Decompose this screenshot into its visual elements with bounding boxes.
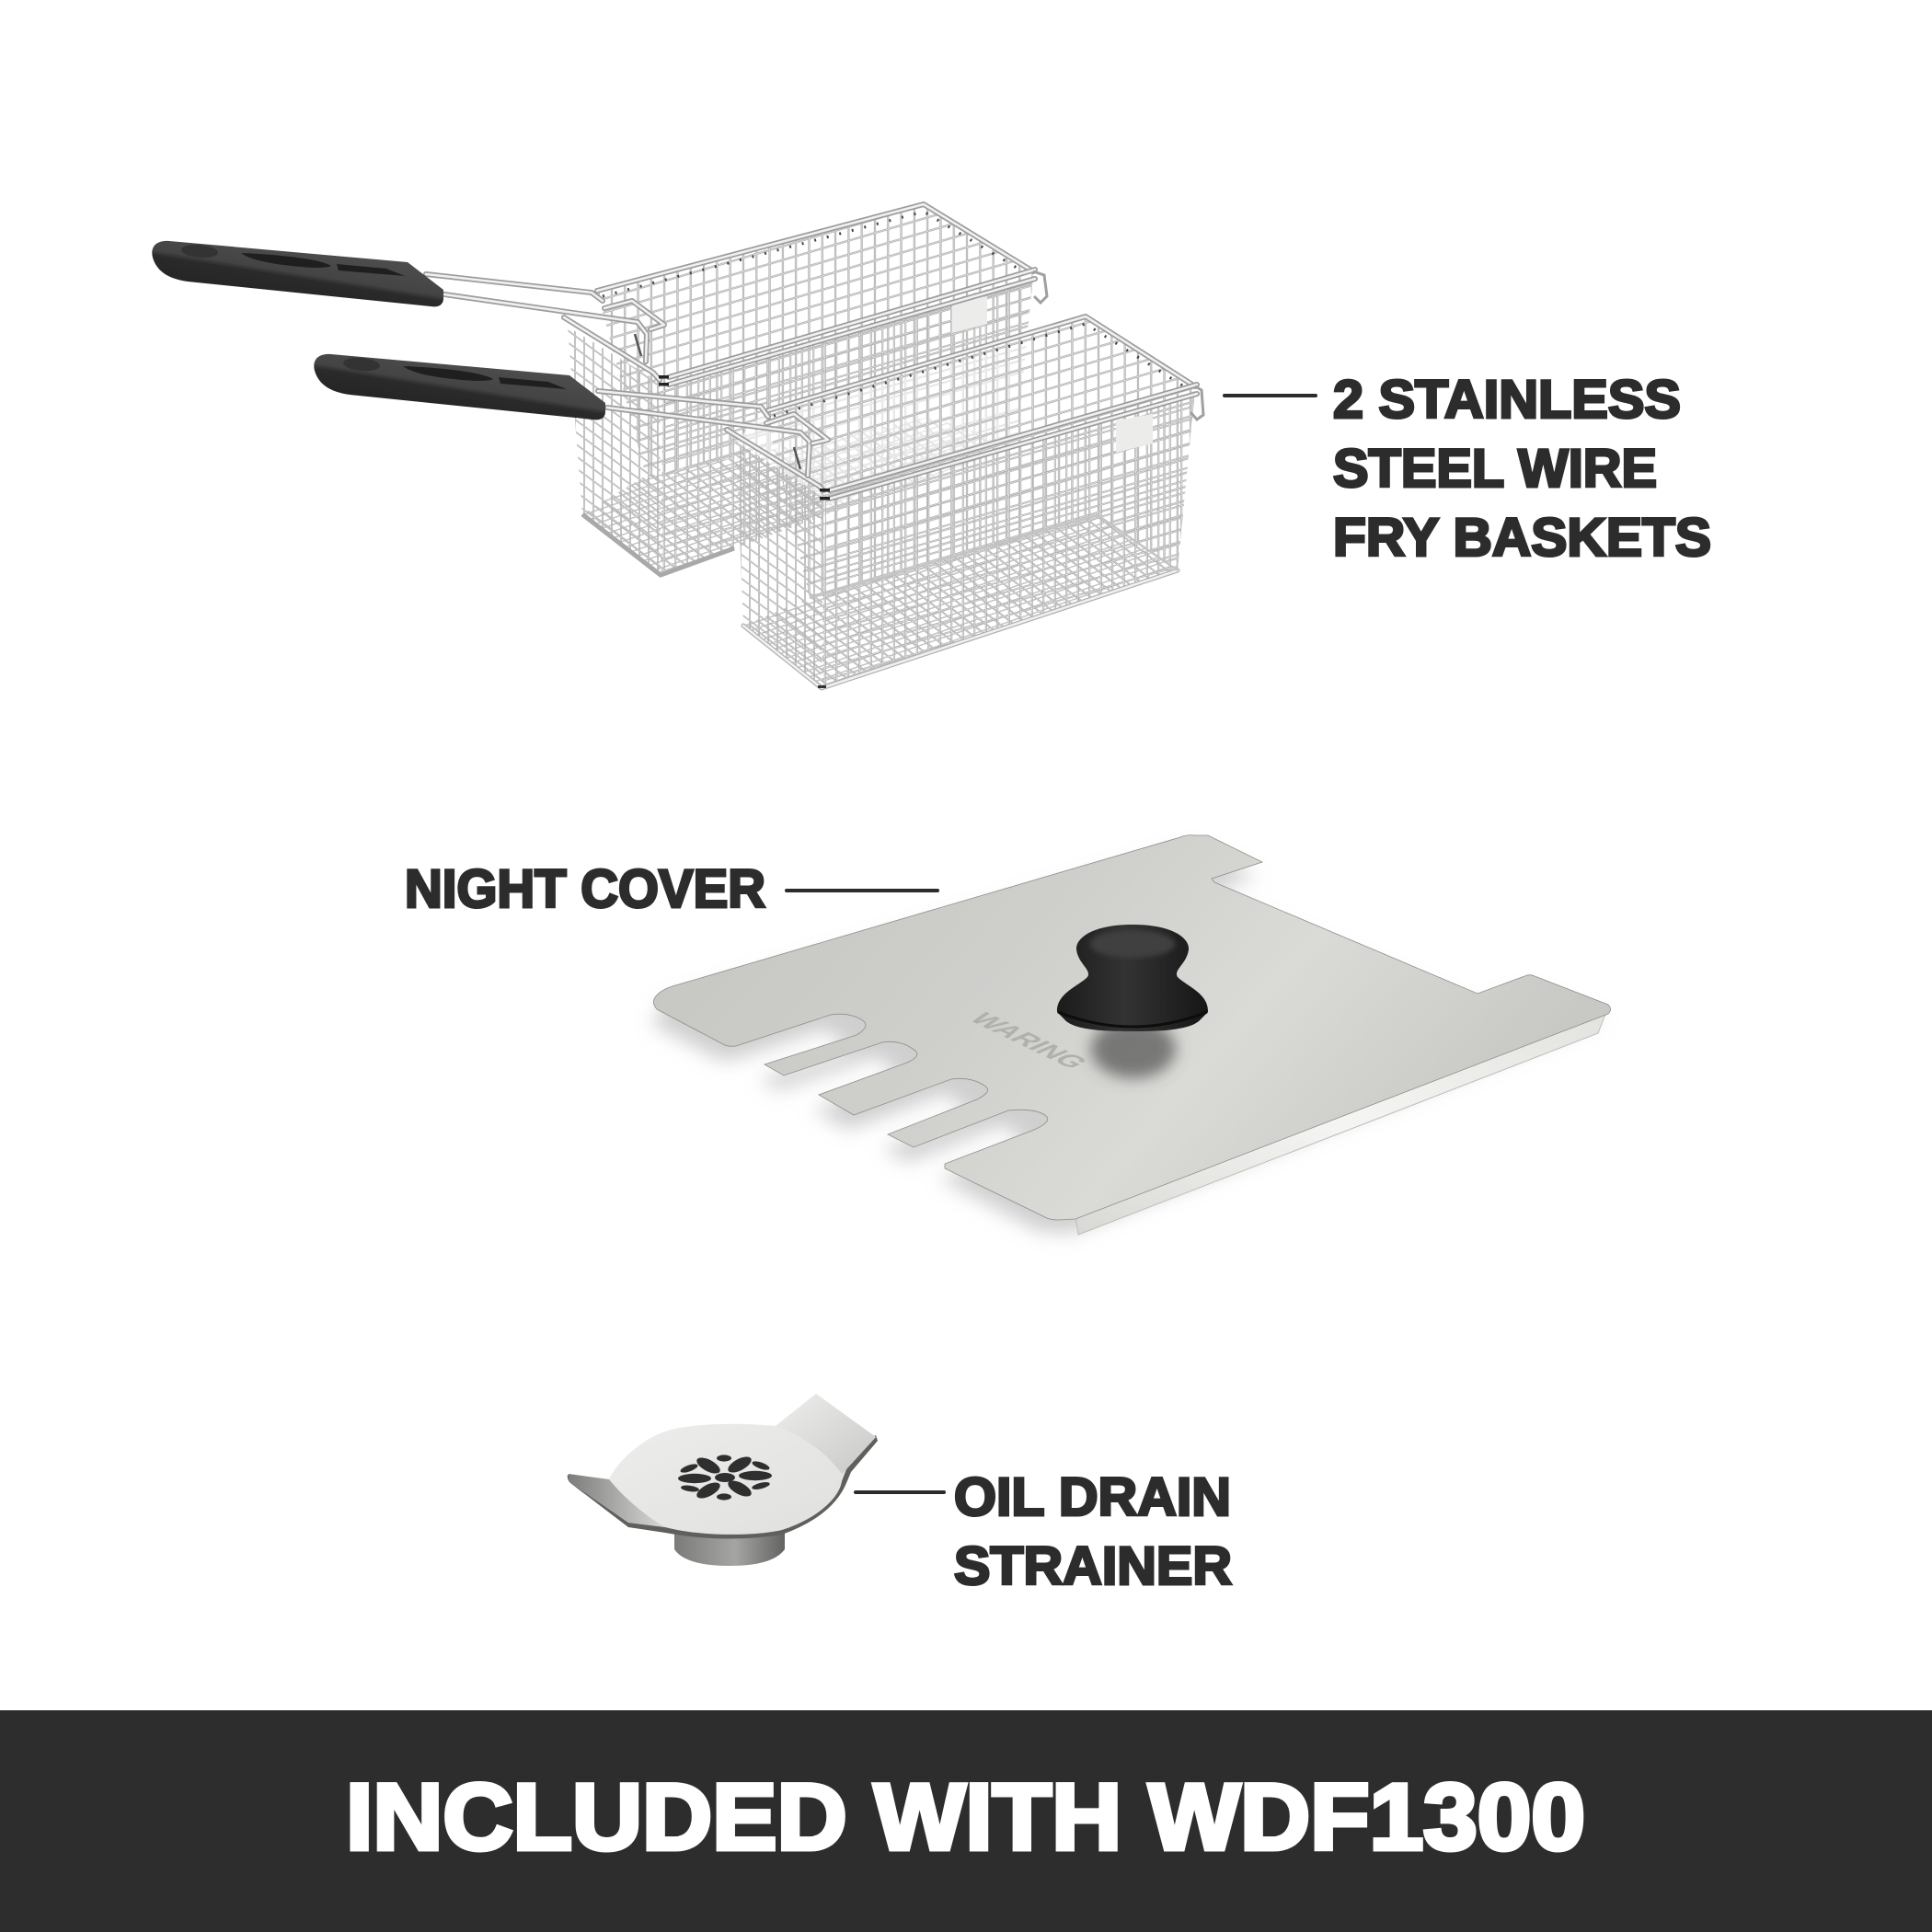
cover knob reflection [1091, 1019, 1176, 1078]
embossed brand: WARING [961, 1009, 1096, 1072]
label text: strainer: OIL DRAIN [954, 1467, 1231, 1527]
cover plate [653, 835, 1610, 1220]
strainer left tab [569, 1474, 665, 1527]
night cover product image [651, 835, 1610, 1235]
back basket handle [152, 241, 664, 362]
label: 2 stainless steel wire fry baskets [1225, 370, 1711, 568]
label text: strainer: STRAINER [954, 1536, 1232, 1596]
back basket [564, 204, 1047, 575]
front basket handle [314, 354, 828, 476]
strainer base [674, 1532, 785, 1566]
label: oil drain strainer [856, 1467, 1232, 1596]
cover shadow [651, 850, 1603, 1234]
fry baskets product image [152, 204, 1203, 688]
strainer right tab [776, 1394, 876, 1474]
strainer holes [678, 1454, 772, 1501]
leader line: night cover [787, 889, 937, 892]
front basket [727, 316, 1203, 688]
strainer top surface [569, 1394, 876, 1535]
label text: night cover: NIGHT COVER [405, 859, 765, 919]
label text: baskets [1333, 370, 1711, 568]
knob [1057, 925, 1208, 1031]
cover front lip [1075, 1012, 1606, 1235]
label text: strainer [954, 1467, 1232, 1596]
strainer rim [568, 1435, 878, 1539]
leader line: strainer [856, 1490, 944, 1494]
footer title: INCLUDED WITH WDF1300 [346, 1765, 1585, 1869]
label text: baskets: 2 STAINLESS [1333, 370, 1681, 430]
oil drain strainer product image [568, 1394, 878, 1566]
footer band [0, 1710, 1932, 1932]
label text: baskets: FRY BASKETS [1333, 508, 1711, 568]
leader line: baskets [1225, 394, 1316, 397]
label text: baskets: STEEL WIRE [1333, 439, 1657, 499]
